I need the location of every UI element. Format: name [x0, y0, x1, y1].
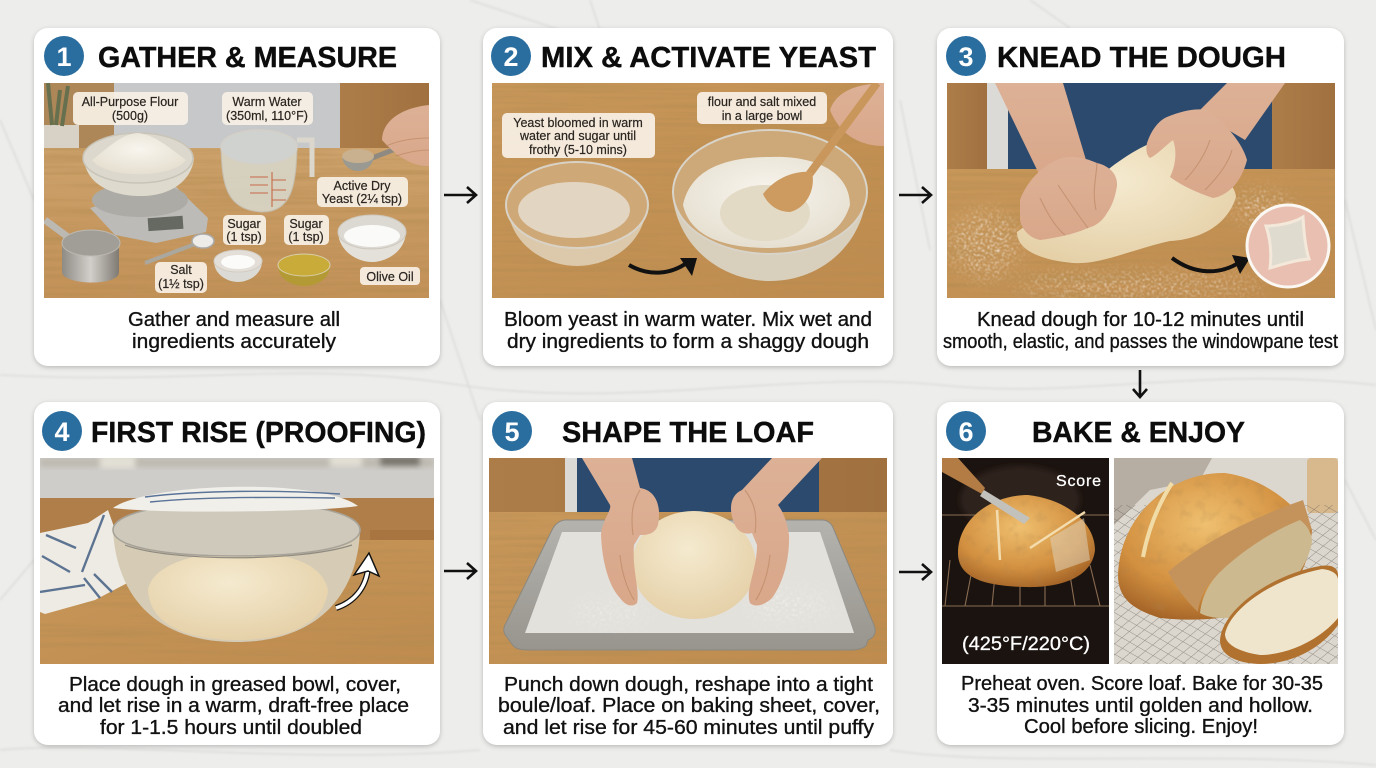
step 4 description — [58, 674, 409, 739]
hands — [1020, 109, 1247, 240]
kitchen scale — [90, 183, 208, 243]
labels: Olive Oil — [366, 270, 414, 284]
labels: Warm Water — [232, 95, 302, 109]
bread slice — [1220, 565, 1338, 664]
step 4 description: and let rise in a warm, draft-free place — [58, 695, 409, 717]
labels: (1 tsp) — [226, 230, 262, 244]
step 2 badge: 2 — [503, 42, 519, 72]
labels: Yeast bloomed in warm — [513, 116, 643, 130]
glass bowl with dough — [113, 502, 360, 642]
small sugar bowl — [214, 250, 262, 282]
curved arrow — [1172, 255, 1250, 274]
arrow: step 4 to 5 — [444, 563, 476, 579]
step 5 heading: SHAPE THE LOAF — [562, 417, 814, 449]
step 4 badge: 4 — [54, 417, 70, 447]
cooling rack — [1114, 505, 1338, 664]
step 6 description: 3-35 minutes until golden and hollow. — [968, 695, 1313, 717]
step 5 badge: 5 — [504, 417, 520, 447]
labels — [502, 92, 827, 158]
small yeast bowl — [506, 162, 648, 266]
panel: step 5 shape the loaf — [483, 402, 893, 745]
scoring lame — [942, 458, 1030, 524]
panel: step 6 bake and enjoy — [937, 402, 1344, 745]
step 1 description: ingredients accurately — [132, 331, 336, 353]
step 6 description: Preheat oven. Score loaf. Bake for 30-35 — [961, 673, 1323, 695]
labels: frothy (5-10 mins) — [529, 143, 627, 157]
bowl of flour — [83, 133, 194, 196]
curved arrow — [629, 258, 697, 276]
hands and arms — [582, 458, 822, 605]
steel measuring cup — [45, 220, 120, 283]
step 3 heading: KNEAD THE DOUGH — [997, 42, 1286, 74]
floured crust band — [1168, 500, 1312, 612]
dough — [1017, 137, 1236, 263]
panel: step 3 knead the dough — [937, 28, 1344, 366]
step 1 description — [128, 309, 340, 353]
flour dusting on sheet — [600, 596, 810, 620]
step 2 description — [504, 309, 872, 353]
step 4 heading: FIRST RISE (PROOFING) — [91, 417, 426, 449]
photo: dough proofing in bowl — [40, 456, 434, 664]
labels: (500g) — [112, 109, 148, 123]
parchment — [525, 532, 854, 633]
towel cover — [113, 487, 358, 512]
step 5 badge — [492, 411, 532, 451]
photo: shaping on baking sheet — [489, 458, 887, 664]
step 5 description: boule/loaf. Place on baking sheet, cover, — [498, 695, 880, 717]
panel: step 1 gather and measure — [34, 28, 440, 366]
arrow: step 2 to 3 — [899, 187, 931, 203]
step 1 badge: 1 — [56, 42, 72, 72]
cut face — [1200, 520, 1312, 618]
labels: (1½ tsp) — [158, 277, 204, 291]
wooden spoon and hand — [763, 83, 884, 212]
arms — [995, 83, 1285, 176]
photo: kneading — [947, 83, 1335, 298]
photo: finished loaf on rack — [1114, 458, 1338, 664]
step 1 badge — [44, 36, 84, 76]
labels: Salt — [170, 263, 192, 277]
labels: Sugar — [227, 217, 261, 231]
step 6 description: Cool before slicing. Enjoy! — [1024, 716, 1258, 738]
photo: loaf in oven — [942, 458, 1109, 664]
labels: in a large bowl — [722, 109, 802, 123]
step 4 description: for 1-1.5 hours until doubled — [100, 717, 362, 739]
yeast scoop and hand — [342, 105, 429, 171]
rising arrow — [336, 553, 379, 608]
step 2 description: dry ingredients to form a shaggy dough — [507, 331, 869, 353]
step 2 heading: MIX & ACTIVATE YEAST — [541, 42, 876, 74]
salt spoon — [145, 234, 214, 263]
large flour bowl — [672, 130, 867, 281]
baking tray — [504, 520, 875, 650]
step 5 description: Punch down dough, reshape into a tight — [504, 674, 873, 696]
step 6 heading: BAKE & ENJOY — [1032, 417, 1245, 449]
step 3 badge — [946, 36, 986, 76]
step 2 badge — [491, 36, 531, 76]
step 4 description: Place dough in greased bowl, cover, — [69, 674, 401, 696]
arrow: step 5 to 6 — [899, 564, 931, 580]
step 1 heading: GATHER & MEASURE — [98, 42, 397, 74]
labels: Active Dry — [334, 179, 391, 193]
labels: All-Purpose Flour — [82, 95, 178, 109]
step 2 description: Bloom yeast in warm water. Mix wet and — [504, 309, 872, 331]
step 3 badge: 3 — [958, 42, 974, 72]
loaf — [1118, 473, 1312, 620]
right hand — [731, 458, 822, 605]
step 6 badge — [946, 411, 986, 451]
striped towel — [40, 510, 133, 614]
step 4 badge — [42, 411, 82, 451]
photo: ingredients on table — [44, 83, 429, 298]
left fist — [1020, 157, 1117, 240]
olive oil bowl — [278, 254, 330, 286]
score label: Score — [1056, 473, 1101, 490]
panel: step 4 first rise — [34, 402, 440, 745]
dough ball — [632, 511, 756, 619]
labels: flour and salt mixed — [708, 95, 816, 109]
right hand — [1146, 109, 1247, 198]
measuring jug of water — [221, 130, 312, 212]
photo: mixing bowls — [492, 83, 884, 298]
labels: (1 tsp) — [288, 230, 324, 244]
step 3 description: Knead dough for 10-12 minutes until — [977, 309, 1304, 331]
step 5 description — [498, 674, 880, 739]
step 5 description: and let rise for 45-60 minutes until puffy — [503, 717, 874, 739]
arrow: step 1 to 2 — [444, 187, 476, 203]
labels: water and sugar until — [519, 129, 636, 143]
step 1 description: Gather and measure all — [128, 309, 340, 331]
step 6 badge: 6 — [958, 417, 974, 447]
arrow: step 3 to 6 — [1133, 370, 1147, 397]
step 3 description: smooth, elastic, and passes the windowpane test — [943, 331, 1338, 353]
windowpane test inset — [1247, 205, 1329, 287]
step 6 description — [961, 673, 1323, 738]
flour dusting — [951, 192, 1292, 298]
left hand — [582, 458, 659, 605]
panel: step 2 mix and activate yeast — [483, 28, 893, 366]
temperature label: (425°F/220°C) — [962, 634, 1090, 655]
step 3 description — [943, 309, 1338, 353]
labels: (350ml, 110°F) — [226, 109, 308, 123]
labels: Yeast (2¼ tsp) — [322, 192, 402, 206]
large sugar bowl — [338, 215, 406, 262]
labels — [73, 92, 420, 293]
labels: Sugar — [289, 217, 323, 231]
